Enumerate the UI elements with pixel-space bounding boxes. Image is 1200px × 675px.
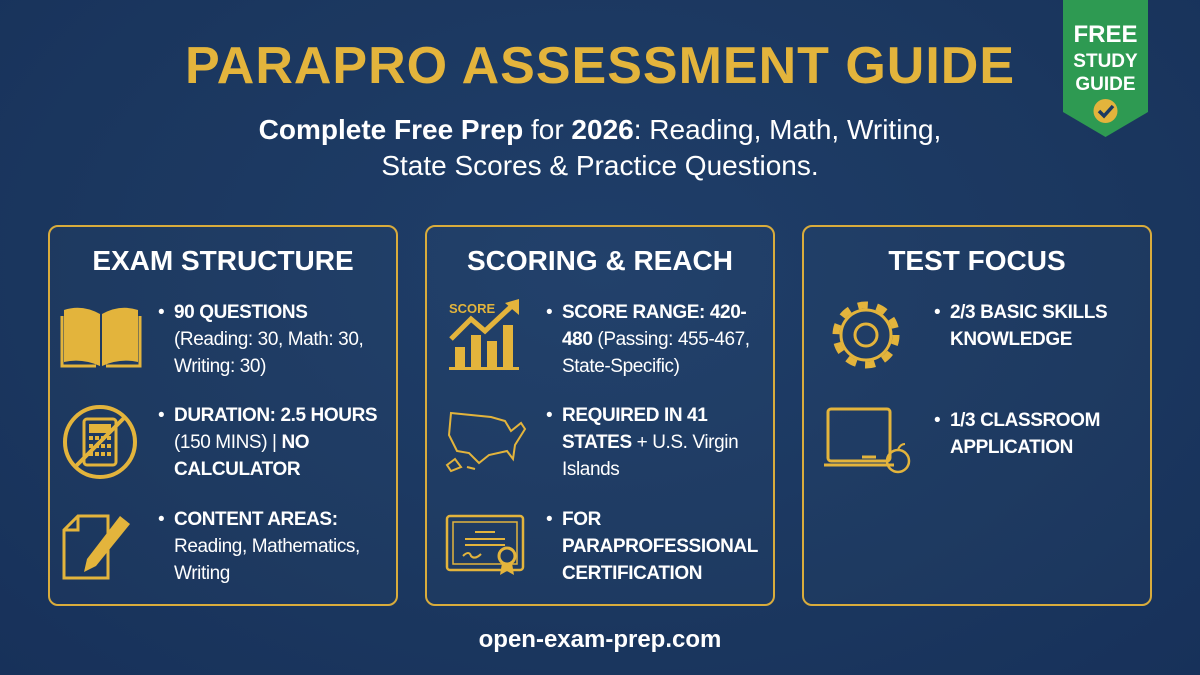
badge: free study guide (1063, 0, 1148, 137)
icon: board with apple (824, 408, 910, 474)
icon: no calculator (63, 405, 137, 479)
icon: score chart (449, 299, 519, 370)
badge: free study guide: GUIDE (1075, 74, 1136, 95)
text: content areas (174, 506, 392, 587)
icon: paper and pencil (62, 514, 130, 580)
panel: test focus (802, 225, 1152, 606)
text: content areas: Reading, Mathematics, Writing (174, 536, 360, 584)
icon: certificate (446, 514, 524, 575)
panel: exam structure (48, 225, 398, 606)
footer url: open-exam-prep.com (479, 626, 721, 653)
badge: free study guide: FREE (1073, 21, 1138, 48)
text: questions (174, 299, 392, 380)
icon: gear (832, 302, 900, 368)
heading: EXAM STRUCTURE (92, 245, 354, 276)
text: certification: FOR PARAPROFESSIONAL CERTIFICATION (562, 509, 758, 584)
badge: free study guide: STUDY (1073, 51, 1138, 72)
text: classroom application: 1/3 CLASSROOM APPLICATION (950, 410, 1100, 458)
text: required states: REQUIRED IN 41 STATES + U.S. Virgin Islands (562, 405, 738, 480)
panel: scoring & reach (425, 225, 775, 606)
icon: book (60, 308, 142, 368)
subtitle: State Scores & Practice Questions. (381, 150, 819, 181)
text: questions: 90 QUESTIONS (174, 302, 308, 323)
subtitle (259, 114, 941, 181)
text: duration: (150 MINS) | NO CALCULATOR (174, 432, 309, 480)
text: score range: SCORE RANGE: 420-480 (Passing: 455-467, State-Specific) (562, 302, 750, 377)
text: questions: (Reading: 30, Math: 30, Writing: 30) (174, 329, 363, 377)
text: duration (174, 402, 392, 483)
icon: US map (446, 412, 526, 472)
icon: score chart: SCORE (449, 301, 496, 316)
text: content areas: CONTENT AREAS: (174, 509, 338, 530)
text: duration: DURATION: 2.5 HOURS (174, 405, 377, 426)
title: PARAPRO ASSESSMENT GUIDE (185, 37, 1015, 95)
subtitle: Complete Free Prep for 2026: Reading, Math, Writing, (259, 114, 941, 145)
heading: SCORING & REACH (467, 245, 733, 276)
text: basic skills: 2/3 BASIC SKILLS KNOWLEDGE (950, 302, 1107, 350)
heading: TEST FOCUS (888, 245, 1066, 276)
